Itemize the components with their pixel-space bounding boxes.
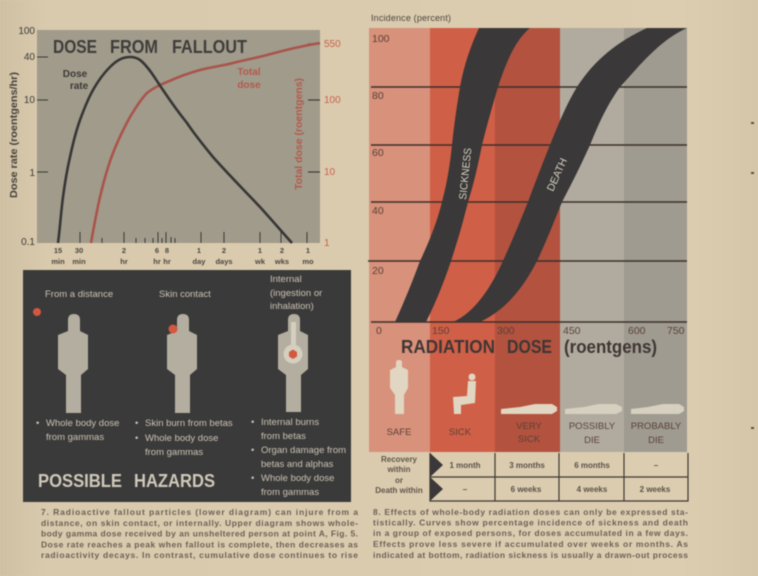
status labels: DIE: [584, 435, 600, 446]
panel title: [38, 471, 215, 491]
x axis title: [401, 337, 657, 357]
label: dose rate: rate: [70, 81, 89, 92]
column 2 effects: Skin burn from betas: [145, 418, 233, 429]
panel title: POSSIBLE: [38, 471, 122, 491]
grid lines: [368, 87, 687, 322]
table: recovery or death: [375, 453, 688, 501]
icon: body, skin contact: [167, 314, 197, 413]
time axis labels: 2: [280, 246, 284, 255]
caption 8: Effects prove less severe if accumulated over weeks or months. As: [373, 539, 688, 549]
chart: radiation dose bands: [368, 28, 687, 452]
icon: seated person: [453, 374, 476, 414]
time axis labels: wk: [254, 257, 266, 266]
icon: particle on skin: [168, 324, 178, 334]
curve band: sickness: [395, 28, 530, 322]
panel background: [23, 270, 351, 502]
x axis labels: [376, 325, 685, 337]
table values: 1 month: [449, 461, 481, 470]
x axis labels: 750: [667, 325, 685, 337]
left axis labels: 0.1: [21, 237, 35, 248]
chart title: [53, 37, 247, 57]
column 3 effects: •: [251, 473, 254, 484]
column 3 effects: from gammas: [261, 487, 319, 498]
left axis labels: [18, 26, 35, 248]
time axis labels: [51, 246, 314, 266]
table values: 3 months: [509, 461, 545, 470]
table values: –: [463, 485, 468, 494]
column 2 effects: •: [135, 418, 138, 429]
y axis labels: 100: [372, 33, 390, 45]
caption 8: 8. Effects of whole-body radiation doses can only be expressed sta-: [373, 507, 688, 517]
column headings: inhalation): [270, 301, 314, 312]
column 3 effects: from betas: [261, 431, 306, 442]
icon: standing person: [390, 360, 408, 414]
table values: 4 weeks: [577, 485, 608, 494]
right axis labels: 550: [324, 39, 341, 50]
right axis labels: [324, 39, 341, 249]
y axis labels: 20: [372, 265, 384, 277]
time axis labels: hr: [153, 257, 161, 266]
x axis title: (roentgens): [564, 337, 657, 357]
curve band: death: [453, 28, 687, 322]
column 1 effects: from gammas: [46, 432, 104, 443]
caption 7: Dose rate reaches a peak when fallout is complete, then decreases as: [41, 540, 358, 550]
curve: dose rate: [58, 57, 292, 243]
icon: lying person 2: [565, 404, 622, 414]
table values: –: [654, 461, 659, 470]
time axis labels: 1: [258, 246, 262, 255]
status labels: POSSIBLY: [569, 421, 616, 432]
caption 8: indicated at bottom, radiation sickness is usually a drawn-out process: [373, 550, 688, 560]
caption 8: in a group of exposed persons, for doses accumulated in a few days.: [373, 528, 688, 538]
caption 8: tistically. Curves show percentage incidence of sickness and death: [373, 518, 688, 528]
status labels: VERY: [516, 421, 543, 432]
band: probably die: [624, 28, 687, 452]
column 3 effects: betas and alphas: [261, 459, 334, 470]
chart title: FROM: [110, 37, 158, 57]
band: safe: [369, 28, 430, 452]
y axis title: incidence: Incidence (percent): [371, 13, 451, 23]
time axis labels: day: [193, 257, 206, 266]
row labels: or: [395, 476, 403, 485]
label: dose rate: Dose: [63, 69, 88, 80]
label: death: DEATH: [545, 156, 570, 193]
right axis ticks: [308, 44, 320, 172]
chart title: DOSE: [53, 37, 97, 57]
time axis labels: 1: [306, 246, 310, 255]
time axis labels: days: [215, 257, 233, 266]
column headings: [45, 274, 322, 312]
icon: body, distance: [58, 314, 88, 413]
row labels: [375, 455, 423, 495]
band: very sick: [495, 28, 560, 452]
column 1 effects: [36, 418, 119, 443]
column headings: Internal: [270, 274, 302, 285]
column 3 effects: Whole body dose: [261, 473, 334, 484]
column 2 effects: from gammas: [145, 447, 203, 458]
time axis labels: 2: [222, 246, 226, 255]
caption 8: [373, 507, 688, 560]
column 2 effects: •: [135, 433, 138, 444]
table values: 2 weeks: [640, 485, 671, 494]
panel title: HAZARDS: [134, 471, 215, 491]
icon: body, internal: [278, 314, 308, 412]
column 3 effects: Organ damage from: [261, 445, 346, 456]
time axis labels: 8: [165, 246, 169, 255]
chart title: FALLOUT: [172, 37, 247, 57]
right axis labels: 10: [324, 167, 336, 178]
column 3 effects: [251, 417, 346, 498]
caption 7: body gamma dose received by an unsheltered person at point A, Fig. 5.: [41, 528, 358, 538]
table values: 6 months: [574, 461, 610, 470]
time axis labels: min: [51, 257, 65, 266]
label: dose rate: [63, 69, 89, 92]
column 2 effects: Whole body dose: [145, 433, 218, 444]
time axis labels: mo: [302, 257, 314, 266]
left axis labels: 100: [18, 26, 35, 37]
status labels: SAFE: [387, 427, 411, 438]
label: total dose: Total: [237, 67, 261, 78]
status labels: DIE: [648, 435, 664, 446]
caption 7: 7. Radioactive fallout particles (lower diagram) can injure from a: [41, 507, 358, 517]
row labels: within: [386, 465, 411, 474]
column 1 effects: Whole body dose: [46, 418, 119, 429]
time axis labels: 15: [54, 246, 62, 255]
column headings: Skin contact: [159, 289, 211, 300]
curve: total dose: [91, 43, 320, 243]
time axis labels: wks: [274, 257, 289, 266]
y axis labels: 40: [372, 205, 384, 217]
table values: [449, 461, 671, 494]
column 1 effects: •: [36, 418, 39, 429]
icon: particle at a distance: [33, 308, 41, 316]
caption 7: radioactivity decays. In contrast, cumulative dose continues to rise: [41, 550, 358, 560]
y axis labels: 80: [372, 90, 384, 102]
column 2 effects: [135, 418, 233, 458]
table values: 6 weeks: [511, 485, 542, 494]
right axis labels: 1: [324, 238, 330, 249]
label: total dose: [237, 67, 261, 91]
x axis labels: 300: [497, 325, 515, 337]
caption 7: distance, on skin contact, or internally. Upper diagram shows whole-: [41, 518, 358, 528]
time axis labels: 30: [75, 246, 83, 255]
status labels: [387, 421, 682, 446]
icon: lying person 1: [501, 404, 557, 414]
time axis labels: min: [72, 257, 86, 266]
chart: dose from fallout: [9, 26, 341, 266]
left axis labels: 40: [24, 52, 35, 63]
x axis title: RADIATION: [401, 337, 495, 357]
band: possibly die: [560, 28, 624, 452]
x axis title: DOSE: [507, 337, 552, 357]
left axis ticks: [37, 57, 48, 172]
label: total dose: dose: [237, 80, 261, 91]
left axis labels: 1: [29, 168, 35, 179]
x axis labels: 0: [376, 325, 382, 337]
y axis labels: 60: [372, 147, 384, 159]
row labels: Death within: [375, 486, 423, 495]
time axis labels: 1: [197, 246, 201, 255]
row labels: Recovery: [381, 455, 418, 464]
time axis labels: 2: [122, 246, 126, 255]
column headings: (ingestion or: [270, 288, 322, 299]
column headings: From a distance: [45, 289, 113, 300]
label: sickness: SICKNESS: [457, 147, 474, 200]
status labels: SICK: [449, 427, 472, 438]
status labels: PROBABLY: [631, 421, 682, 432]
x axis labels: 150: [432, 325, 450, 337]
left axis title: Dose rate (roentgens/hr): [9, 72, 20, 198]
time axis labels: hr: [163, 257, 171, 266]
chart background: [37, 30, 320, 243]
y axis labels: [372, 33, 390, 277]
row arrows: [430, 453, 443, 501]
status labels: SICK: [518, 434, 541, 445]
panel: possible hazards: [23, 270, 351, 502]
right axis title: Total dose (roentgens): [294, 78, 305, 190]
column 3 effects: Internal burns: [261, 417, 319, 428]
x axis labels: 600: [628, 325, 646, 337]
column 3 effects: •: [251, 417, 254, 428]
time axis labels: 6: [155, 246, 159, 255]
x axis labels: 450: [563, 325, 581, 337]
time ticks: [80, 232, 307, 243]
left axis labels: 10: [24, 95, 35, 106]
icon: lying person 3: [631, 404, 684, 414]
column 3 effects: •: [251, 445, 254, 456]
right axis labels: 100: [324, 95, 341, 106]
table grid: [430, 453, 688, 501]
caption 7: [41, 507, 358, 560]
time axis labels: hr: [120, 257, 128, 266]
band: sick: [430, 28, 495, 452]
